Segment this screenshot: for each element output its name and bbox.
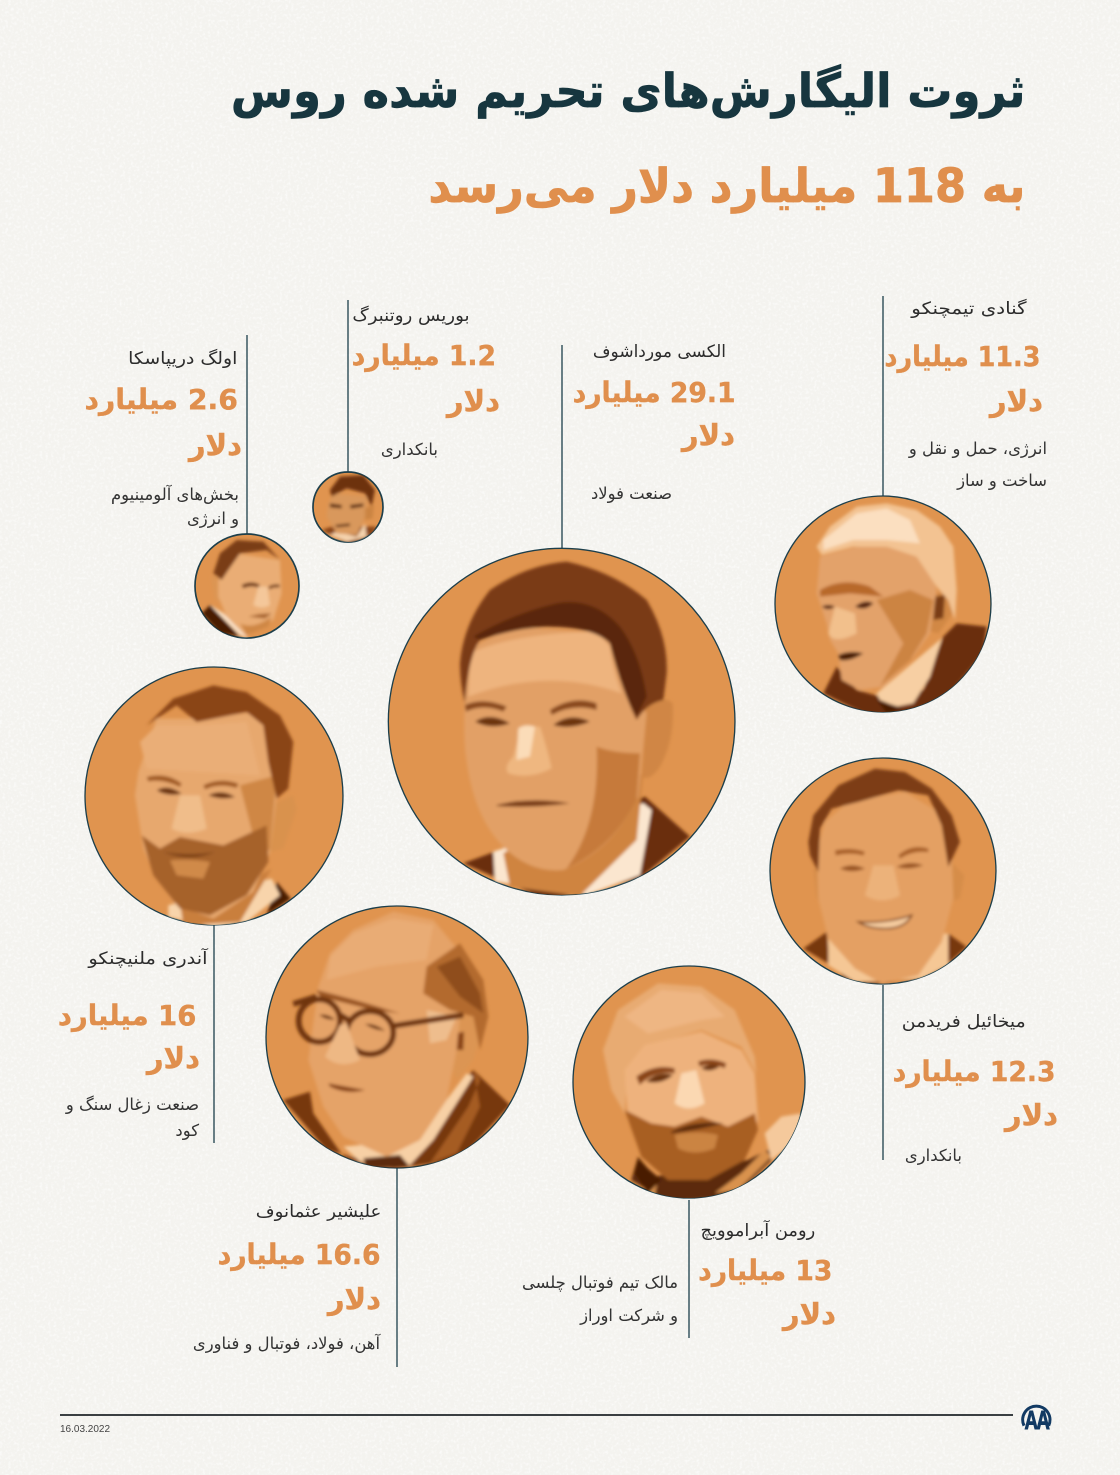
- portrait: Fridman: [770, 758, 996, 985]
- sector line 2: ساخت و ساز: [957, 471, 1047, 490]
- amount: 16.6 میلیارد: [217, 1238, 380, 1271]
- amount: 12.3 میلیارد: [892, 1055, 1055, 1088]
- portrait: Abramovich: [573, 966, 805, 1202]
- info block: Timchenko: [884, 298, 1047, 490]
- name: آندری ملنیچنکو: [89, 949, 208, 969]
- subtitle: به 118 میلیارد دلار می‌رسد: [428, 159, 1025, 214]
- connector lines: [214, 296, 883, 1367]
- portrait: Usmanov: [266, 906, 528, 1168]
- amount: 2.6 میلیارد: [84, 383, 238, 416]
- info block: Fridman: [892, 1012, 1058, 1165]
- sector: انرژی، حمل و نقل و: [909, 439, 1047, 458]
- portrait: Deripaska: [195, 534, 299, 638]
- portrait: Mordashov: [388, 548, 735, 900]
- currency: دلار: [990, 384, 1043, 418]
- amount: 13 میلیارد: [698, 1254, 832, 1287]
- currency: دلار: [447, 384, 500, 418]
- currency: دلار: [189, 428, 242, 462]
- currency: دلار: [1005, 1098, 1058, 1132]
- icon: AA logo: AA: [1025, 1405, 1049, 1435]
- amount: 16 میلیارد: [57, 999, 196, 1032]
- portraits and connector lines: [84, 296, 997, 1367]
- info block: Abramovich: [698, 1220, 836, 1332]
- currency: دلار: [682, 418, 735, 452]
- amount: 11.3 میلیارد: [884, 340, 1040, 373]
- sector line 2: و شرکت اوراز: [580, 1306, 678, 1325]
- portrait: Rotenberg: [313, 472, 383, 545]
- sector line 1: مالک تیم فوتبال چلسی: [522, 1273, 678, 1292]
- name: اولگ دریپاسکا: [128, 349, 237, 369]
- name: رومن آبراموویچ: [700, 1221, 815, 1241]
- name: میخائیل فریدمن: [902, 1012, 1026, 1032]
- amount: 29.1 میلیارد: [572, 376, 735, 409]
- info block: Usmanov: [193, 1202, 381, 1353]
- info block: Deripaska: [84, 348, 242, 528]
- portrait: Melnichenko: [85, 667, 343, 927]
- name: الکسی مورداشوف: [593, 342, 726, 362]
- title: ثروت الیگارش‌های تحریم شده روس: [230, 64, 1025, 119]
- amount: 1.2 میلیارد: [352, 339, 496, 372]
- info block: Rotenberg: [352, 306, 500, 459]
- currency: دلار: [328, 1282, 381, 1316]
- sector: بانکداری: [905, 1146, 962, 1165]
- sector: Abramovich: [522, 1273, 678, 1325]
- currency: دلار: [147, 1041, 200, 1075]
- currency: دلار: [783, 1297, 836, 1331]
- sector: آهن، فولاد، فوتبال و فناوری: [193, 1334, 380, 1353]
- sector line 2: و انرژی: [187, 509, 239, 528]
- info block: Mordashov: [572, 342, 735, 503]
- name: علیشیر عثمانوف: [255, 1202, 381, 1222]
- info block: Melnichenko: [57, 948, 208, 1140]
- portrait: Timchenko: [775, 496, 991, 717]
- footer rule: [60, 1414, 1013, 1416]
- date: 16.03.2022: [60, 1424, 110, 1435]
- sector: بخش‌های آلومینیوم: [111, 485, 239, 504]
- name: بوریس روتنبرگ: [353, 306, 470, 326]
- sector: صنعت فولاد: [591, 484, 672, 503]
- sector line 2: کود: [175, 1121, 199, 1140]
- sector: صنعت زغال سنگ و: [66, 1095, 199, 1114]
- name: گنادی تیمچنکو: [912, 299, 1027, 319]
- sector: بانکداری: [381, 440, 438, 459]
